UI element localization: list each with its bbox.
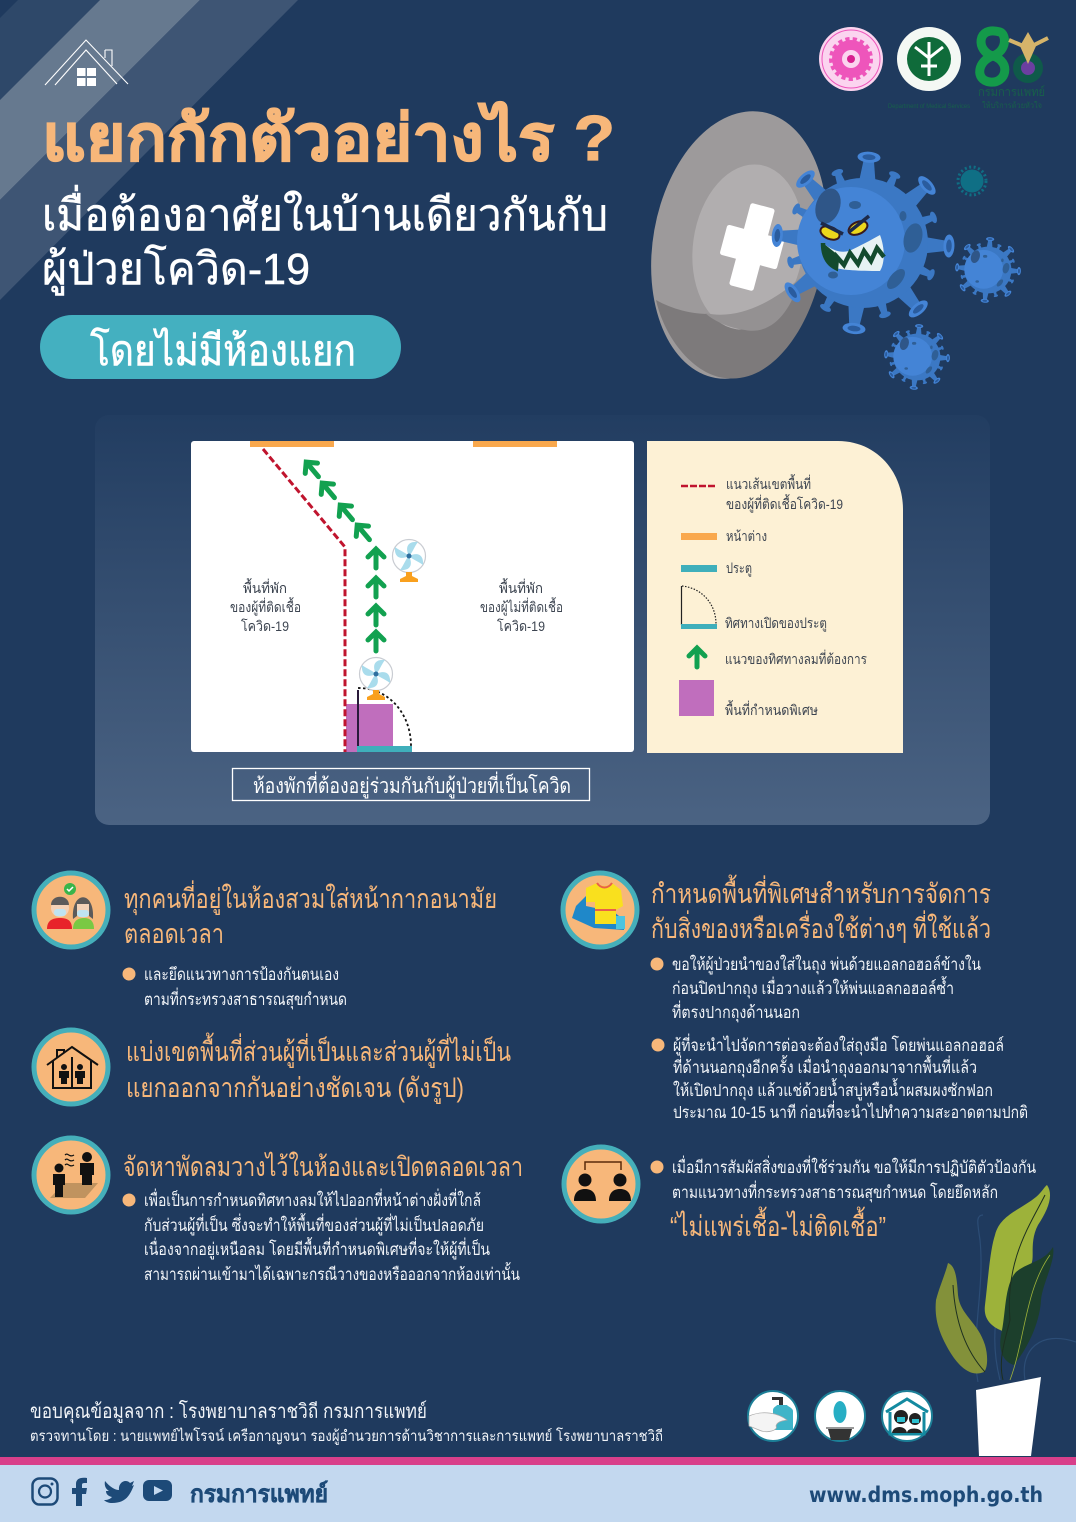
legend: ทิศทางเปิดของประตู (725, 615, 827, 632)
heading (651, 874, 991, 944)
bullet text (650, 1155, 1036, 1203)
red boundary line (263, 449, 345, 752)
heading: ตลอดเวลา (124, 919, 224, 949)
logos: กรมการแพทย์ (978, 85, 1045, 99)
heading: แบ่งเขตพื้นที่ส่วนผู้ที่เป็นและส่วนผู้ที่ไม่เป็น (126, 1032, 511, 1068)
bullet text (122, 965, 347, 1010)
legend: หน้าต่าง (726, 528, 767, 544)
header diagonal stripes (0, 0, 298, 300)
credit: reviewer: ตรวจทานโดย : นายแพทย์ไพโรจน์ เครือกาญจนา รองผู้อำนวยการด้านวิชาการและการแพทย์ โรงพยาบาลราชวิถี (30, 1427, 663, 1445)
section: masks (34, 873, 497, 1010)
slogan: “ไม่แพร่เชื้อ-ไม่ติดเชื้อ” (670, 1206, 886, 1242)
heading: ทุกคนที่อยู่ในห้องสวมใส่หน้ากากอนามัย (124, 880, 497, 916)
bullet text: ตามที่กระทรวงสาธารณสุขกำหนด (144, 987, 347, 1010)
heading (126, 1032, 511, 1104)
label: non-infected area: โควิด-19 (497, 618, 545, 634)
icon: two people (564, 1147, 638, 1221)
label: infected area: พื้นที่พัก (243, 578, 287, 596)
logos: ให้บริการด้วยหัวใจ (982, 101, 1042, 110)
label: infected area: โควิด-19 (241, 618, 289, 634)
heading: แยกออกจากกันอย่างชัดเจน (ดังรูป) (126, 1073, 464, 1104)
virus: big with angry face (771, 151, 955, 335)
pill: no separate room: โดยไม่มีห้องแยก (90, 326, 356, 374)
heading: กับสิ่งของหรือเครื่องใช้ต่างๆ ที่ใช้แล้ว (651, 910, 991, 944)
bullet text: ตามแนวทางที่กระทรวงสาธารณสุขกำหนด โดยยึดหลัก (672, 1180, 998, 1203)
legend: แนวของทิศทางลมที่ต้องการ (725, 650, 867, 667)
logos: Department of Medical Services (888, 104, 970, 110)
logos (819, 27, 1048, 110)
website: www.dms.moph.go.th (809, 1483, 1043, 1507)
section: fan (34, 1138, 523, 1284)
heading (124, 880, 497, 949)
room plan (191, 441, 634, 752)
panel: room diagram backdrop (95, 415, 990, 825)
virus: small bottom (884, 324, 950, 390)
section: used items (563, 873, 1028, 1122)
credit: source: ขอบคุณข้อมูลจาก : โรงพยาบาลราชวิถี กรมการแพทย์ (30, 1400, 427, 1424)
footer bar (0, 1457, 1076, 1522)
section: separate zones (34, 1030, 511, 1104)
heading: จัดหาพัดลมวางไว้ในห้องและเปิดตลอดเวลา (123, 1151, 523, 1182)
fans (360, 540, 426, 700)
bullet text: เพื่อเป็นการกำหนดทิศทางลมให้ไปออกที่หน้าต่างฝั่งที่ใกล้ (144, 1188, 481, 1210)
legend: แนวเส้นเขตพื้นที่ (726, 474, 811, 492)
plant (936, 1185, 1076, 1456)
pill: no separate room (40, 315, 401, 379)
windows (250, 441, 557, 447)
label: infected area (230, 578, 301, 634)
shield (631, 97, 847, 393)
small icons: handwash, mask disposal, masked family (748, 1391, 932, 1441)
bullet text: กับส่วนผู้ที่เป็น ซึ่งจะทำให้พื้นที่ของส่วนผู้ที่ไม่เป็นปลอดภัย (144, 1213, 484, 1236)
bullet text 2: ผู้ที่จะนำไปจัดการต่อจะต้องใส่ถุงมือ โดยพ่นแอลกอฮอล์ (673, 1033, 1004, 1056)
social icons (32, 1478, 172, 1506)
bullet text 2: ให้เปิดปากถุง แล้วแช่ด้วยน้ำสบู่หรือน้ำผสมผงซักฟอก (673, 1078, 993, 1101)
bullet text 2: ที่ด้านนอกถุงอีกครั้ง เมื่อนำถุงออกมาจากพื้นที่แล้ว (673, 1055, 977, 1078)
subtitle (42, 184, 608, 296)
label: infected area: ของผู้ที่ติดเชื้อ (230, 597, 301, 616)
bullet text 1: ที่ตรงปากถุงด้านนอก (672, 1000, 800, 1023)
section: shared items (564, 1147, 1036, 1242)
icon: clothes (563, 873, 637, 947)
heading: กำหนดพื้นที่พิเศษสำหรับการจัดการ (651, 874, 991, 909)
agency name: กรมการแพทย์ (190, 1480, 328, 1508)
subtitle: เมื่อต้องอาศัยในบ้านเดียวกันกับ (42, 184, 608, 240)
bullet text (122, 1188, 520, 1284)
legend: ของผู้ที่ติดเชื้อโควิด-19 (726, 494, 843, 513)
legend (647, 441, 903, 753)
bullet text: สามารถผ่านเข้ามาได้เฉพาะกรณีวางของหรือออกจากห้องเท่านั้น (144, 1262, 520, 1284)
bullet text 1: ขอให้ผู้ป่วยนำของใส่ในถุง พ่นด้วยแอลกอฮอล์ข้างใน (672, 954, 981, 975)
icon: house with two people (34, 1030, 108, 1104)
label: non-infected area (480, 578, 563, 634)
legend: ประตู (726, 560, 752, 577)
caption (232, 768, 590, 800)
special area (346, 688, 412, 752)
virus: small right (955, 237, 1021, 303)
label: non-infected area: ของผู้ไม่ที่ติดเชื้อ (480, 597, 563, 616)
pot (976, 1377, 1041, 1456)
legend: พื้นที่กำหนดพิเศษ (725, 700, 818, 718)
label: non-infected area: พื้นที่พัก (499, 578, 543, 596)
bullet text 1: ก่อนปิดปากถุง เมื่อวางแล้วให้พ่นแอลกอฮอล์ซ้ำ (672, 976, 954, 999)
bullet text: เนื่องจากอยู่เหนือลม โดยมีพื้นที่กำหนดพิเศษที่จะให้ผู้ที่เป็น (144, 1237, 490, 1260)
airflow arrows (300, 457, 384, 651)
caption: ห้องพักที่ต้องอยู่ร่วมกันกับผู้ป่วยที่เป็นโควิด (253, 771, 571, 799)
bullet text 2 (652, 1033, 1028, 1122)
bullet text 1 (650, 954, 981, 1023)
bullet text: และยึดแนวทางการป้องกันตนเอง (144, 965, 339, 984)
title: แยกกักตัวอย่างไร ? (42, 101, 615, 174)
icon: masked people (34, 873, 108, 947)
icon: house (45, 40, 128, 86)
icon: people and airflow (34, 1138, 108, 1212)
virus: small teal (958, 167, 986, 195)
subtitle: ผู้ป่วยโควิด-19 (42, 244, 310, 296)
